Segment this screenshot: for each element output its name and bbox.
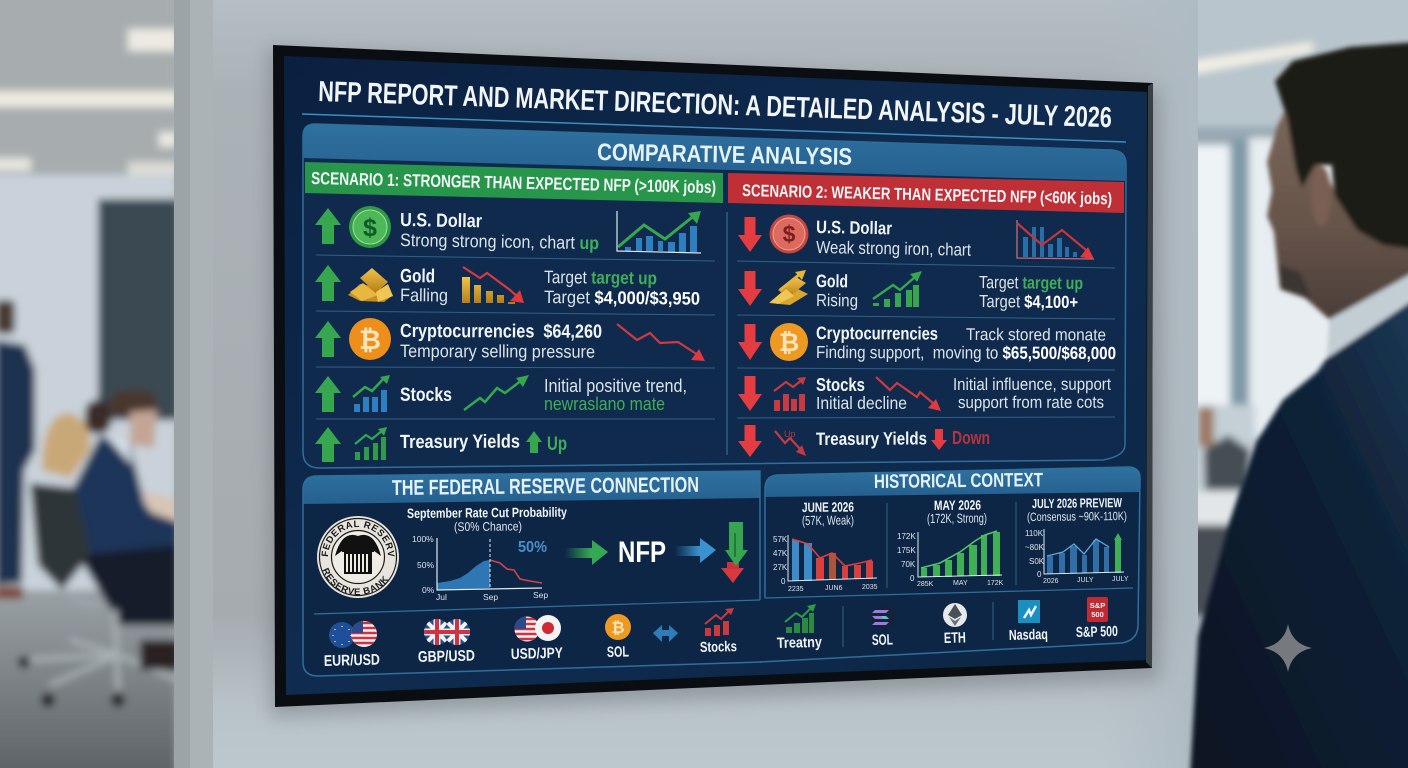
market: S&P 500 xyxy=(1076,597,1118,641)
market: USD/JPY xyxy=(511,615,563,663)
man: ear xyxy=(1311,166,1331,226)
scenario 1 row: Gold: Target $4,000/$3,950 xyxy=(544,287,700,309)
scenario 1 header: SCENARIO 1: STRONGER THAN EXPECTED NFP (>100K jobs) xyxy=(311,168,716,197)
chart: May 2026: 0 xyxy=(910,574,915,583)
scenario 2 row: Stocks: Stocks xyxy=(816,375,865,395)
chart: June 2026: JUNE 2026 xyxy=(802,499,854,515)
chart: May 2026: MAY xyxy=(953,580,968,587)
scenario 1 row: Treasury Yields: Up xyxy=(547,434,567,455)
chart: dollar down xyxy=(1017,220,1094,259)
icon: dollar coin xyxy=(349,206,391,248)
chart: June 2026: 57K xyxy=(773,535,788,544)
chart: rate cut probability: 0% xyxy=(422,585,435,595)
market: GBP/USD: GBP/USD xyxy=(418,648,475,666)
icon: blue double arrow xyxy=(653,625,678,642)
market: USD/JPY: USD/JPY xyxy=(511,645,563,663)
chart: July 2026 preview: JULY xyxy=(1112,576,1129,583)
man: neck and face xyxy=(1267,110,1408,320)
market: SOL coin: SOL xyxy=(607,643,629,661)
scenario 2 row: Treasury Yields: Down xyxy=(952,428,990,448)
chart: May 2026: (172K, Strong) xyxy=(927,510,987,526)
display shadow xyxy=(268,48,1160,718)
chart: gold falling xyxy=(462,267,524,304)
scenario 2 row: Treasury Yields: Treasury Yields xyxy=(816,428,927,449)
icon: gold bars rising xyxy=(769,270,808,305)
man: jaw shadow xyxy=(1278,265,1312,300)
background: blurred office on the left xyxy=(0,0,180,768)
icon: down arrow xyxy=(738,217,762,252)
icon: down arrow xyxy=(738,425,762,457)
icon: bitcoin xyxy=(770,323,808,361)
panel fill xyxy=(762,467,1140,662)
market: Nasdaq: Nasdaq xyxy=(1009,627,1048,644)
icon: federal reserve seal xyxy=(317,516,399,598)
market: SOL coin xyxy=(605,614,631,661)
heading: federal reserve connection: THE FEDERAL RESERVE CONNECTION xyxy=(392,473,699,500)
market: ETH: ETH xyxy=(944,629,966,647)
scenario 1 row: Cryptocurrencies xyxy=(315,318,705,362)
scenario 2 row: Cryptocurrencies xyxy=(738,323,1116,363)
market: EUR/USD xyxy=(324,621,380,666)
icon: gold bars xyxy=(348,268,393,302)
market: treaty: Treatny xyxy=(777,634,823,652)
scenario 1 row: Stocks: newraslano mate xyxy=(544,394,665,414)
market: stocks xyxy=(700,608,737,656)
scenario 1 row: Gold: Falling xyxy=(400,285,448,306)
icon: down arrow xyxy=(738,376,762,411)
arrow: blue out of NFP xyxy=(675,538,716,563)
scenario 1 row: Gold: Target target up xyxy=(544,267,657,288)
market: S&P 500: S&P 500 xyxy=(1076,624,1118,641)
scenario 1 row: Gold xyxy=(315,265,700,309)
icon: federal reserve seal: FEDERAL RESERVE xyxy=(321,520,395,556)
display screen xyxy=(284,56,1147,695)
scenario 1 row: U.S. Dollar: Strong strong icon, chart up xyxy=(400,230,599,253)
chart: June 2026: 47K xyxy=(773,549,788,558)
icon: treasury chart xyxy=(355,427,387,460)
scenario 2 row: Treasury Yields xyxy=(738,425,990,457)
scenario 1 row: Stocks: Stocks xyxy=(400,385,452,406)
market: treaty xyxy=(777,604,823,652)
chart: rate cut probability xyxy=(412,534,548,602)
scenario 1 row: Stocks xyxy=(315,375,687,414)
man: shirt collar xyxy=(1327,270,1408,358)
chart: rate cut probability: 50% xyxy=(417,560,434,570)
scenario 2 row: Cryptocurrencies: Cryptocurrencies xyxy=(816,323,938,344)
panel header band xyxy=(303,471,760,504)
chart: rate cut probability: Jul xyxy=(436,592,447,602)
market: GBP/USD xyxy=(418,619,474,662)
heading: comparative analysis: COMPARATIVE ANALYSIS xyxy=(597,139,852,171)
chart: May 2026: 175K xyxy=(897,546,916,555)
chart: rate cut probability: Sep xyxy=(483,592,498,602)
scenario 2 row: U.S. Dollar xyxy=(738,214,1094,260)
chart: May 2026: MAY 2026 xyxy=(934,498,981,513)
scenario 1 row: Cryptocurrencies: Temporary selling pressure xyxy=(400,341,595,362)
callout: 50%: 50% xyxy=(518,539,547,556)
icon: treasury falling xyxy=(775,429,806,456)
icon: down arrow xyxy=(738,324,762,360)
market: SOL: SOL xyxy=(872,631,893,649)
chart: June 2026: 0 xyxy=(781,577,786,586)
scenario 2 header xyxy=(728,173,1124,213)
scenario 2 row: Cryptocurrencies: Track stored monate xyxy=(966,325,1106,344)
chart: July 2026 preview: (Consensus ~90K-110K) xyxy=(1027,509,1127,524)
chart: July 2026 preview: 110K xyxy=(1025,529,1044,538)
panel outline xyxy=(303,124,1126,468)
chart: July 2026 preview xyxy=(1025,495,1129,585)
icon: weak dollar coin xyxy=(770,214,808,254)
market: EUR/USD: EUR/USD xyxy=(324,652,380,670)
market: SOL coin: ₿ xyxy=(611,619,625,637)
scenario 2 row: Gold: Gold xyxy=(816,271,848,291)
scenario 2 row: Gold: Target target up xyxy=(979,272,1083,293)
foreground: man viewing the display xyxy=(1190,42,1408,768)
icon: up arrow xyxy=(315,427,341,462)
icon: bitcoin xyxy=(349,318,391,360)
scenario 1 row: U.S. Dollar: U.S. Dollar xyxy=(400,210,483,232)
scenario 1 row: Treasury Yields xyxy=(315,427,567,462)
chart: June 2026: 27K xyxy=(773,563,788,572)
scenario 2 row: Gold xyxy=(738,270,1083,312)
wall display xyxy=(273,45,1192,746)
market: SOL xyxy=(871,605,895,649)
panel header band xyxy=(765,467,1140,497)
scenario 2 row: U.S. Dollar: Weak strong iron, chart xyxy=(816,237,971,260)
scenario 2 row: Stocks xyxy=(738,375,1111,413)
scenario 2 row: Cryptocurrencies: Finding support, moving to $65,500/$68,000 xyxy=(816,342,1116,363)
panel: the federal reserve connection: (S0% Chance) xyxy=(454,519,522,534)
chart: May 2026 xyxy=(897,498,1004,588)
scenario 1 row: Gold: Gold xyxy=(400,266,435,287)
scenario 1 row: Treasury Yields: Treasury Yields xyxy=(400,432,520,453)
chart: July 2026 preview: JULY 2026 PREVIEW xyxy=(1032,495,1123,511)
icon: weak dollar coin: $ xyxy=(783,221,796,247)
market: S&P 500: S&P xyxy=(1090,601,1105,610)
background: blurred office on the right xyxy=(1190,0,1408,615)
chart: May 2026: 285K xyxy=(917,581,934,588)
label: NFP: NFP xyxy=(618,536,666,569)
chart: July 2026 preview: ~80K xyxy=(1025,543,1045,552)
icon: treasury falling: Up xyxy=(784,429,796,439)
panel: the federal reserve connection xyxy=(302,470,762,677)
icon: stocks bars xyxy=(353,375,390,412)
chart: June 2026: JUN6 xyxy=(825,585,843,592)
icon: up arrow xyxy=(315,208,341,244)
icon: federal reserve seal: RESERVE BANK xyxy=(322,568,388,595)
market: Nasdaq xyxy=(1009,600,1048,644)
chart: rate cut probability: Sep xyxy=(533,590,548,600)
chart: rate cut probability: 100% xyxy=(412,534,434,544)
panel fill xyxy=(303,471,762,676)
chart: stocks rising line xyxy=(464,375,529,410)
chart: July 2026 preview: 2026 xyxy=(1043,578,1059,585)
panel header band xyxy=(303,124,1126,181)
chart: July 2026 preview: S0K xyxy=(1029,557,1045,566)
chart: dollar up xyxy=(617,211,701,253)
chart: June 2026 xyxy=(773,499,878,593)
scenario 1 row: U.S. Dollar xyxy=(315,206,701,253)
icon: bitcoin: ₿ xyxy=(779,329,799,357)
panel: historical context xyxy=(760,467,1140,662)
chart: July 2026 preview: 0 xyxy=(1037,570,1042,579)
chart: June 2026: 2235 xyxy=(788,586,804,593)
scenario 2 header: SCENARIO 2: WEAKER THAN EXPECTED NFP (<60K jobs) xyxy=(742,181,1112,208)
icon: up arrow xyxy=(315,376,341,412)
display frame xyxy=(273,45,1153,707)
icon: dollar coin: $ xyxy=(363,214,377,242)
wall behind the display xyxy=(212,0,1198,768)
market: ETH xyxy=(943,603,967,647)
icon: up arrow xyxy=(315,265,341,301)
icon: bitcoin: ₿ xyxy=(359,325,381,355)
scenario 2 row: Stocks: support from rate cots xyxy=(958,393,1104,412)
man: suit xyxy=(1190,297,1408,768)
chart: stocks falling line xyxy=(876,377,941,411)
scenario 1 row: Cryptocurrencies: Cryptocurrencies $64,260 xyxy=(400,321,602,343)
chart: May 2026: 172K xyxy=(897,532,916,541)
scenario 2 row: Gold: Rising xyxy=(816,290,858,310)
scenario 2 row: U.S. Dollar: U.S. Dollar xyxy=(816,217,892,238)
chart: June 2026: 2035 xyxy=(862,584,878,591)
wall column xyxy=(174,0,213,768)
market: stocks: Stocks xyxy=(700,639,737,656)
chart: May 2026: 172K xyxy=(987,580,1004,587)
icon: down arrow xyxy=(738,271,762,306)
scenario 1 header xyxy=(305,162,723,203)
arrow: green into NFP xyxy=(565,540,608,565)
panel: comparative analysis xyxy=(303,124,1126,468)
scenario 2 row: Stocks: Initial influence, support xyxy=(953,375,1111,394)
icon: small up arrow xyxy=(526,431,542,453)
chart: July 2026 preview: JULY xyxy=(1077,577,1094,584)
chart: crypto falling line xyxy=(617,324,705,361)
icon: mixed direction arrows xyxy=(721,522,748,583)
scenario 1 row: Stocks: Initial positive trend, xyxy=(544,376,687,396)
watermark: sparkle xyxy=(1264,624,1312,672)
icon: stocks red xyxy=(774,377,806,411)
market: S&P 500: 500 xyxy=(1091,610,1104,619)
chart: May 2026: 70K xyxy=(901,560,916,569)
title: NFP REPORT AND MARKET DIRECTION: A DETAILED ANALYSIS - JULY 2026 xyxy=(318,76,1112,134)
heading: historical context: HISTORICAL CONTEXT xyxy=(874,469,1043,493)
chart: gold rising xyxy=(873,271,922,307)
man: hair xyxy=(1275,42,1408,250)
icon: up arrow xyxy=(315,321,341,357)
scenario 2 row: Stocks: Initial decline xyxy=(816,393,907,413)
icon: small down arrow xyxy=(931,429,947,450)
panel: the federal reserve connection: September Rate Cut Probability xyxy=(407,505,567,521)
scenario 2 row: Gold: Target $4,100+ xyxy=(979,291,1078,312)
chart: June 2026: (57K, Weak) xyxy=(802,512,854,528)
